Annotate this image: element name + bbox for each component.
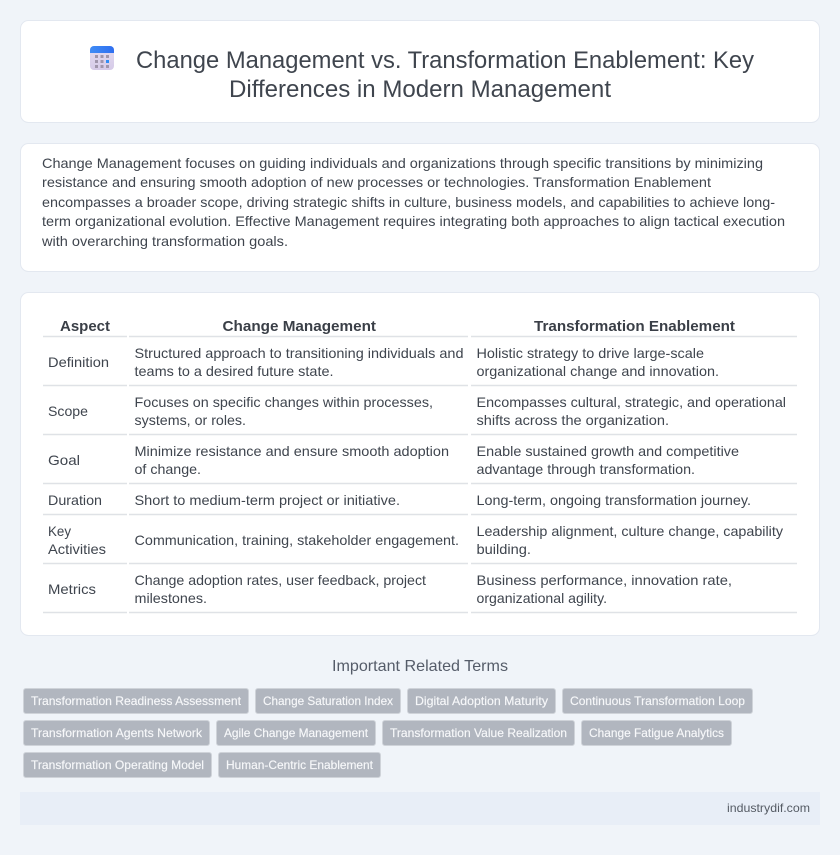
row: metrics: milestones. <box>134 590 207 606</box>
tag: Change Saturation Index <box>263 694 393 708</box>
row: goal: Goal <box>48 452 80 468</box>
row: definition: teams to a desired future state. <box>134 363 334 379</box>
intro paragraph: term organizational evolution. Effective Management requires integrating both approaches to align tactical execution <box>42 213 785 229</box>
row: metrics: Change adoption rates, user feedback, project <box>134 572 426 588</box>
tag <box>562 688 752 714</box>
tag: Human-Centric Enablement <box>226 758 374 772</box>
row: definition: organizational change and innovation. <box>476 363 719 379</box>
row: key activities <box>48 523 783 557</box>
title <box>136 47 754 103</box>
tag <box>218 752 380 778</box>
title: Differences in Modern Management <box>229 76 611 103</box>
title card <box>20 20 820 122</box>
tag <box>382 720 574 746</box>
row: key activities: Leadership alignment, culture change, capability <box>476 523 783 539</box>
table header: Change Management <box>222 318 376 335</box>
tag <box>408 688 556 714</box>
row: key activities: Communication, training, stakeholder engagement. <box>134 532 459 548</box>
tag: Transformation Operating Model <box>31 758 204 772</box>
title: Change Management vs. Transformation Enablement: Key <box>136 47 754 74</box>
row: metrics: organizational agility. <box>476 590 607 606</box>
row: metrics <box>48 572 732 606</box>
related term tags <box>24 688 752 778</box>
tag <box>582 720 732 746</box>
row: duration: Short to medium-term project or initiative. <box>134 492 400 508</box>
row: definition: Holistic strategy to drive large-scale <box>476 345 704 361</box>
row: goal: of change. <box>134 461 201 477</box>
row: goal: Minimize resistance and ensure smooth adoption <box>134 443 449 459</box>
tag: Transformation Agents Network <box>31 726 203 740</box>
panel: comparison table <box>20 292 820 636</box>
row: metrics: Business performance, innovation rate, <box>476 572 732 588</box>
row: scope: Scope <box>48 403 88 419</box>
tag: Change Fatigue Analytics <box>589 726 724 740</box>
row: duration: Duration <box>48 492 102 508</box>
row: scope: shifts across the organization. <box>476 412 669 428</box>
tag <box>216 720 376 746</box>
tag: Transformation Readiness Assessment <box>31 694 242 708</box>
row: scope <box>48 394 786 428</box>
heading: related terms: Important Related Terms <box>332 658 508 675</box>
row: goal: advantage through transformation. <box>476 461 695 477</box>
row: duration: Long-term, ongoing transformation journey. <box>476 492 751 508</box>
table header <box>60 318 735 335</box>
tag <box>24 752 212 778</box>
row: goal: Enable sustained growth and competitive <box>476 443 739 459</box>
row: scope: Focuses on specific changes within processes, <box>134 394 433 410</box>
footer source: industrydif.com <box>727 801 810 815</box>
row: scope: systems, or roles. <box>134 412 246 428</box>
intro paragraph: with overarching transformation goals. <box>41 233 288 249</box>
tag <box>256 688 400 714</box>
row: key activities: Activities <box>48 541 106 557</box>
footer bar <box>20 792 820 825</box>
tag: Transformation Value Realization <box>390 726 567 740</box>
table header: Transformation Enablement <box>534 318 735 335</box>
row: definition: Definition <box>48 354 109 370</box>
row: definition <box>48 345 719 379</box>
intro paragraph: resistance and ensuring smooth adoption of new processes or technologies. Transformation Enablement <box>42 174 711 190</box>
panel: introduction <box>20 144 820 272</box>
tag <box>24 720 210 746</box>
table header: Aspect <box>60 318 110 335</box>
tag: Agile Change Management <box>224 726 369 740</box>
row: goal <box>48 443 739 477</box>
intro paragraph: Change Management focuses on guiding individuals and organizations through specific transitions by minimizing <box>42 155 763 171</box>
tag <box>24 688 248 714</box>
row: duration <box>48 492 751 508</box>
row: key activities: Key <box>48 523 71 539</box>
intro paragraph: encompasses a broader scope, driving strategic shifts in culture, business models, and capabilities to achieve long- <box>42 194 775 210</box>
row: key activities: building. <box>476 541 531 557</box>
row: metrics: Metrics <box>48 581 96 597</box>
tag: Digital Adoption Maturity <box>415 694 548 708</box>
icon: calendar <box>90 46 114 70</box>
row: definition: Structured approach to transitioning individuals and <box>134 345 464 361</box>
tag: Continuous Transformation Loop <box>570 694 745 708</box>
intro paragraph <box>41 155 785 249</box>
row: scope: Encompasses cultural, strategic, and operational <box>476 394 786 410</box>
